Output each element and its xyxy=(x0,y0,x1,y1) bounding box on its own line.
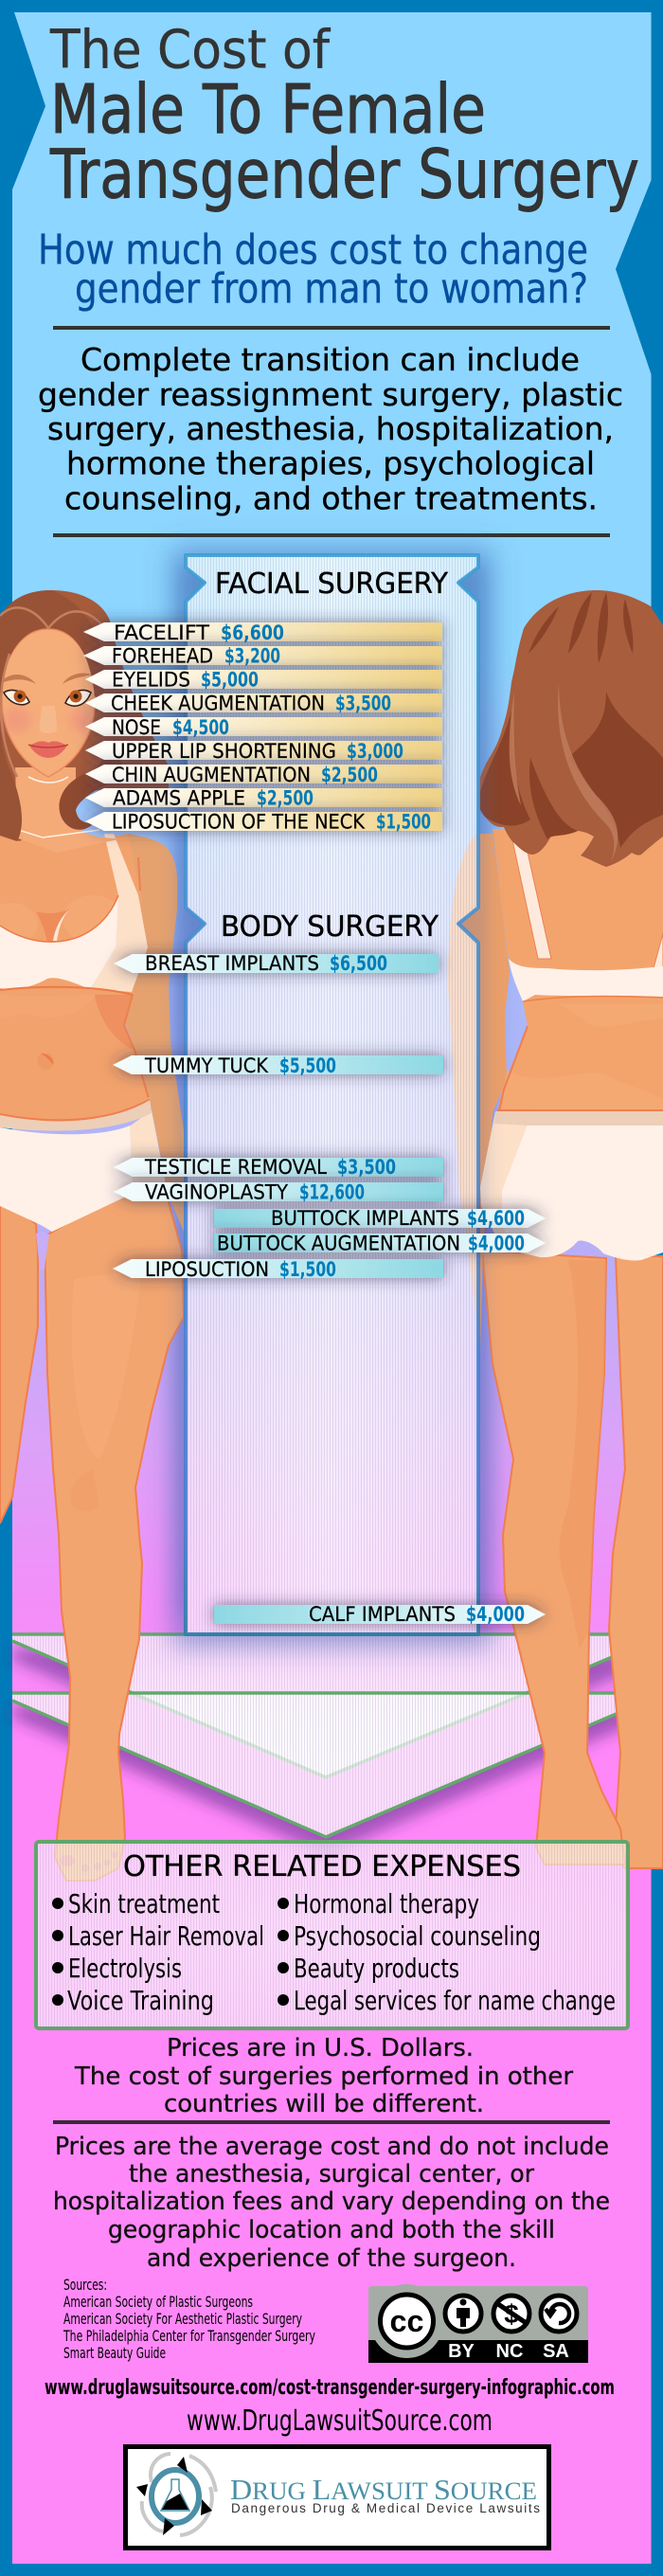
icon: creative commons badge xyxy=(368,2284,588,2363)
blush xyxy=(4,707,93,733)
expenses list: left column: Electrolysis xyxy=(68,1953,182,1984)
icon: flask emblem xyxy=(136,2454,216,2535)
bra back xyxy=(509,959,663,1001)
bar: vaginoplasty xyxy=(114,1180,443,1203)
bar: vaginoplasty: $12,600 xyxy=(299,1180,365,1203)
heading: body surgery: BODY SURGERY xyxy=(221,910,439,944)
illustration: woman front view xyxy=(0,590,185,1881)
note: average cost: and experience of the surgeon. xyxy=(147,2244,516,2273)
torso xyxy=(0,829,152,1125)
expenses list: left column xyxy=(52,1888,264,2016)
bar: liposuction of the neck: $1,500 xyxy=(376,811,431,834)
bar: calf implants: $4,000 xyxy=(466,1603,525,1626)
sources: Smart Beauty Guide xyxy=(63,2344,166,2362)
intro rule top xyxy=(53,326,610,330)
bar: eyelids: EYELIDS xyxy=(112,669,190,692)
bar: tummy tuck: $5,500 xyxy=(279,1054,336,1077)
logo name: DRUG LAWSUIT SOURCE xyxy=(230,2473,537,2506)
bar: chin augmentation xyxy=(85,764,442,786)
bar: adams apple: ADAMS APPLE xyxy=(113,786,245,809)
bar: nose xyxy=(85,716,442,739)
bar: buttock implants xyxy=(214,1207,546,1230)
panel shadow xyxy=(172,548,492,1647)
intro paragraph: gender reassignment surgery, plastic xyxy=(38,376,623,413)
neck xyxy=(0,767,123,853)
icon: creative commons badge: NC xyxy=(496,2341,523,2362)
cleavage xyxy=(36,908,70,943)
chevron arrows xyxy=(12,1634,639,1854)
eyebrows xyxy=(4,673,92,684)
bar: breast implants xyxy=(114,952,439,975)
bar: breast implants: BREAST IMPLANTS xyxy=(145,952,319,975)
underwear xyxy=(128,1110,169,1198)
intro paragraph: hormone therapies, psychological xyxy=(66,445,595,481)
note: currency: The cost of surgeries performed in other xyxy=(74,2063,573,2091)
bar: testicle removal: $3,500 xyxy=(337,1156,396,1179)
logo box xyxy=(125,2446,549,2549)
subtitle question xyxy=(38,225,588,313)
navel xyxy=(37,1053,54,1070)
lips xyxy=(29,741,67,758)
expenses list: right column: Psychosocial counseling xyxy=(294,1920,541,1952)
underwear back xyxy=(480,1111,540,1257)
crotch gap xyxy=(36,1232,49,1270)
breast shading xyxy=(0,895,123,945)
subtitle question: gender from man to woman? xyxy=(75,265,588,313)
note: average cost: geographic location and both the skill xyxy=(108,2216,555,2244)
icon: creative commons badge: cc xyxy=(390,2304,424,2338)
bar: testicle removal xyxy=(114,1156,443,1179)
sources xyxy=(63,2276,315,2362)
bar: nose: NOSE xyxy=(112,716,161,739)
logo tagline: Dangerous Drug & Medical Device Lawsuits xyxy=(231,2501,540,2515)
bar: calf implants: CALF IMPLANTS xyxy=(309,1603,456,1626)
bar: buttock augmentation: BUTTOCK AUGMENTATION xyxy=(217,1232,460,1254)
far leg xyxy=(609,1256,663,1868)
expenses list: right column: Hormonal therapy xyxy=(294,1888,479,1919)
hair front xyxy=(0,590,105,841)
heading: facial surgery: FACIAL SURGERY xyxy=(215,567,449,601)
bar: chin augmentation: CHIN AUGMENTATION xyxy=(112,764,311,786)
facial surgery bars xyxy=(83,621,442,834)
intro paragraph: Complete transition can include xyxy=(81,341,580,378)
illustration: woman back view xyxy=(448,590,663,1868)
bar: adams apple: $2,500 xyxy=(257,786,314,809)
sources: American Society For Aesthetic Plastic Surgery xyxy=(63,2310,302,2328)
face xyxy=(2,629,95,777)
bar: testicle removal: TESTICLE REMOVAL xyxy=(144,1156,327,1179)
title: The Cost of xyxy=(49,19,331,81)
expenses list: left column: Skin treatment xyxy=(68,1888,220,1919)
bar: cheek augmentation: $3,500 xyxy=(335,692,391,714)
sources: Sources: xyxy=(63,2276,107,2294)
arm xyxy=(448,834,510,1350)
sources: American Society of Plastic Surgeons xyxy=(63,2293,253,2311)
bar: vaginoplasty: VAGINOPLASTY xyxy=(145,1180,288,1203)
icon: creative commons badge: $ xyxy=(504,2299,519,2329)
note: average cost: the anesthesia, surgical center, or xyxy=(129,2160,534,2189)
bar: facelift: $6,600 xyxy=(221,621,284,644)
bar: forehead xyxy=(83,644,442,667)
note: currency: Prices are in U.S. Dollars. xyxy=(167,2034,474,2063)
near leg xyxy=(482,1251,625,1864)
back xyxy=(493,829,663,1113)
arm xyxy=(125,834,185,1232)
panel shadow over figures xyxy=(176,568,488,1611)
bar: buttock implants: $4,600 xyxy=(467,1207,525,1230)
expenses list: left column: Voice Training xyxy=(67,1985,214,2016)
icon: creative commons badge: SA xyxy=(543,2341,569,2362)
expenses heading: OTHER RELATED EXPENSES xyxy=(123,1850,521,1883)
eyes xyxy=(4,690,91,706)
title: Male To Female xyxy=(50,70,486,149)
bar: liposuction: LIPOSUCTION xyxy=(145,1258,269,1281)
bar: cheek augmentation xyxy=(85,692,442,714)
bar: upper lip shortening xyxy=(85,740,442,763)
bar: forehead: FOREHEAD xyxy=(112,644,213,667)
note: currency xyxy=(74,2034,573,2118)
note: average cost xyxy=(53,2133,610,2273)
hair xyxy=(478,590,663,867)
bar: upper lip shortening: $3,000 xyxy=(347,740,403,763)
bar: eyelids: $5,000 xyxy=(201,669,259,692)
hair back xyxy=(0,590,169,841)
central panel xyxy=(186,555,478,1634)
bar: liposuction: $1,500 xyxy=(279,1258,336,1281)
bar: liposuction of the neck: LIPOSUCTION OF THE NECK xyxy=(112,811,366,834)
bar: adams apple xyxy=(85,786,442,809)
near leg xyxy=(45,1189,184,1881)
toes xyxy=(60,1851,117,1872)
bar: liposuction xyxy=(113,1258,443,1281)
intro paragraph: surgery, anesthesia, hospitalization, xyxy=(47,410,614,447)
bar: buttock augmentation: $4,000 xyxy=(468,1232,525,1254)
note: average cost: Prices are the average cost and do not include xyxy=(55,2133,609,2161)
expenses list: right column: Beauty products xyxy=(294,1953,459,1984)
bar: facelift: FACELIFT xyxy=(114,621,209,644)
bar: tummy tuck xyxy=(113,1054,443,1077)
note: average cost: hospitalization fees and vary depending on the xyxy=(53,2188,610,2216)
chest line xyxy=(0,824,99,838)
bar: forehead: $3,200 xyxy=(224,644,280,667)
bar: eyelids xyxy=(85,669,442,692)
website url: www.DrugLawsuitSource.com xyxy=(187,2405,493,2438)
sources: The Philadelphia Center for Transgender Surgery xyxy=(63,2327,315,2345)
expenses list: left column: Laser Hair Removal xyxy=(68,1920,264,1952)
title xyxy=(49,19,639,214)
intro paragraph: counseling, and other treatments. xyxy=(64,479,598,517)
bar: facelift xyxy=(83,621,442,644)
bar: upper lip shortening: UPPER LIP SHORTENING xyxy=(112,740,336,763)
bar: cheek augmentation: CHEEK AUGMENTATION xyxy=(111,692,325,714)
note: currency: countries will be different. xyxy=(164,2090,484,2118)
intro rule bottom xyxy=(53,533,610,537)
bar: chin augmentation: $2,500 xyxy=(321,764,378,786)
bar: buttock implants: BUTTOCK IMPLANTS xyxy=(271,1207,459,1230)
icon: creative commons badge: BY xyxy=(448,2341,475,2362)
bra straps xyxy=(509,822,663,968)
note rule xyxy=(53,2120,610,2124)
bar: tummy tuck: TUMMY TUCK xyxy=(144,1054,269,1077)
bar: breast implants: $6,500 xyxy=(330,952,387,975)
intro paragraph xyxy=(38,341,623,517)
nose xyxy=(39,706,58,733)
panel: other related expenses xyxy=(36,1842,628,2028)
bra xyxy=(90,834,148,992)
body surgery bars xyxy=(113,952,546,1626)
bar: nose: $4,500 xyxy=(172,716,229,739)
expenses list: right column xyxy=(278,1888,616,2016)
far leg xyxy=(0,1196,38,1523)
bar: calf implants xyxy=(214,1603,546,1626)
